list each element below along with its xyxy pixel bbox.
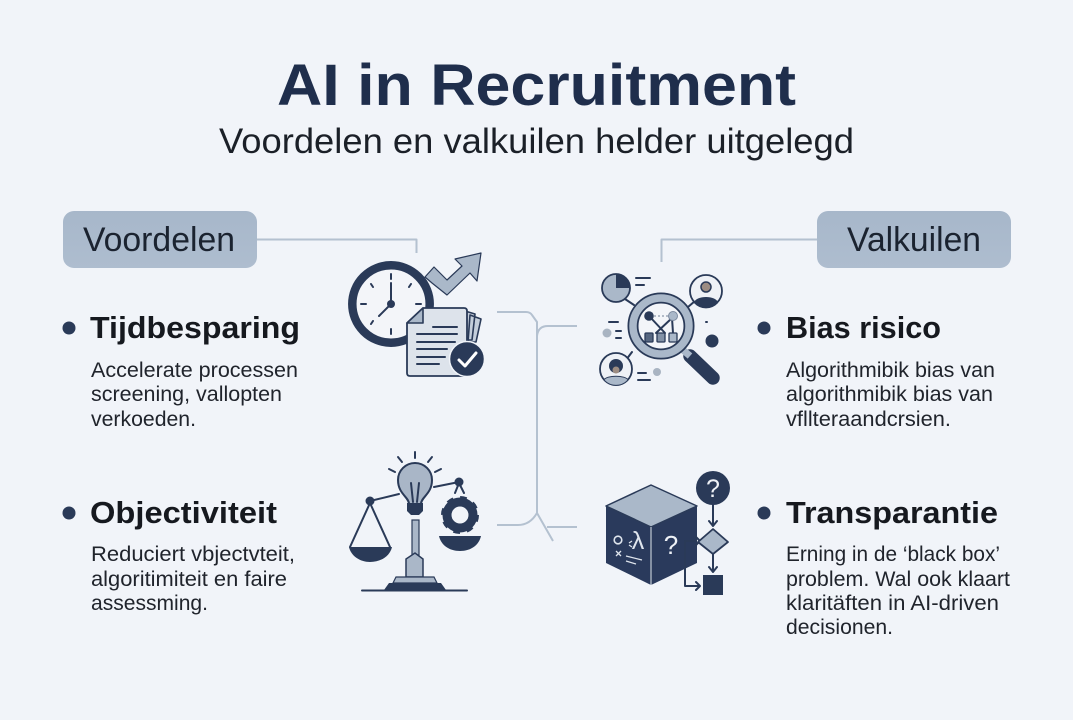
connector: voordelen to icon [257,240,416,253]
block: transparantie: klaritäften in AI-driven [786,592,999,615]
block: objectiviteit: algoritimiteit en faire [91,568,287,591]
connector: valkuilen to icon [662,240,817,262]
block: objectiviteit [62,495,295,615]
icon: black box with question flowchart: ? [706,475,720,503]
block: transparantie [758,495,1010,639]
block: transparantie: Erning in de ‘black box’ [786,543,1000,566]
icon: black box with question flowchart: λ [632,527,645,555]
connector: central branching lines [497,312,577,541]
panel: valkuilen header: Valkuilen [847,221,981,259]
icon: black box with question flowchart: ? [664,530,678,560]
icon: black box with question flowchart [606,471,730,595]
block: tijdbesparing: verkoeden. [91,408,196,431]
block: objectiviteit: Reduciert vbjectvteit, [91,543,295,566]
block: objectiviteit: Objectiviteit [90,495,277,530]
block: tijdbesparing: screening, vallopten [91,383,282,406]
subtitle: Voordelen en valkuilen helder uitgelegd [219,122,854,161]
block: bias risico: Bias risico [786,310,941,345]
block: bias risico [758,310,995,431]
block: tijdbesparing [62,310,300,431]
block: bias risico: algorithmibik bias van [786,383,993,406]
icon: magnifier with people and data [600,274,722,385]
block: transparantie: Transparantie [786,495,998,530]
panel: valkuilen header [817,211,1011,268]
block: transparantie: problem. Wal ook klaart [786,568,1010,591]
block: objectiviteit: assessming. [91,592,208,615]
block: transparantie: decisionen. [786,616,893,639]
icon: scales with lightbulb and gear [349,452,481,590]
panel: voordelen header: Voordelen [83,221,235,259]
title: AI in Recruitment [277,53,796,118]
block: tijdbesparing: Accelerate processen [91,359,298,382]
icon: clock, growth arrow and document [352,253,484,376]
block: bias risico: vfllteraandcrsien. [786,408,951,431]
panel: voordelen header [63,211,257,268]
block: tijdbesparing: Tijdbesparing [90,310,300,345]
block: bias risico: Algorithmibik bias van [786,359,995,382]
